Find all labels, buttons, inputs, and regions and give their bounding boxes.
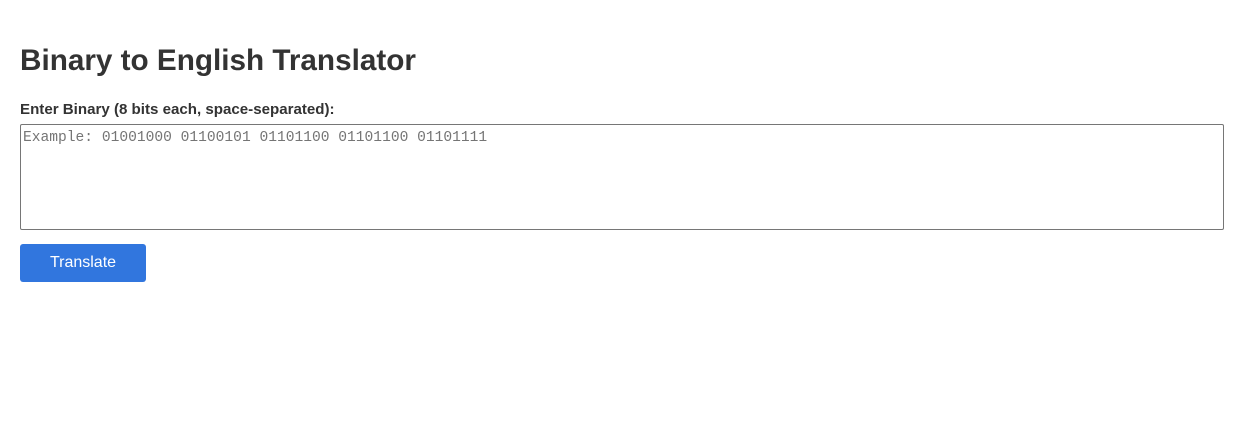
textarea input [20,124,1224,230]
title: Binary to English Translator [20,44,416,77]
translate button [20,244,146,282]
translate button: Translate [50,254,116,271]
input label: Enter Binary (8 bits each, space-separated): [20,101,335,118]
textarea input: Example: 01001000 01100101 01101100 01101100 01101111 [23,130,487,146]
